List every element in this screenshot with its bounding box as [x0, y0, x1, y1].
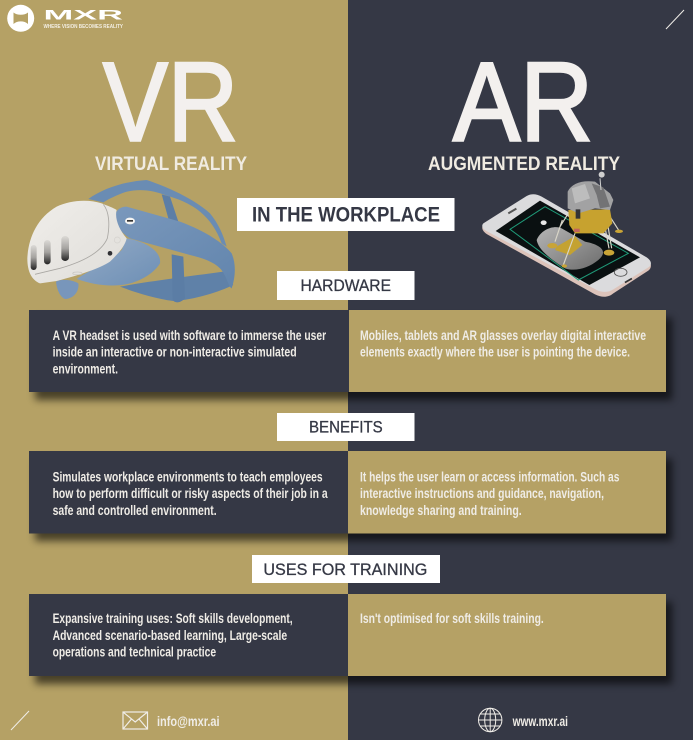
text: email: info@mxr.ai: [157, 714, 220, 729]
icon: globe: [478, 708, 502, 732]
background: VR half: [0, 0, 348, 740]
text: AR benefits: interactive instructions and guidance, navigation,: [360, 486, 604, 501]
text: VR hardware: [53, 328, 327, 376]
decorative slash bottom left: [11, 711, 29, 730]
icon: AR phone with lunar module: [482, 172, 651, 297]
text: VR hardware: environment.: [53, 362, 118, 376]
icon: envelope: [123, 712, 148, 729]
panel: uses for training comparison: [29, 594, 672, 684]
text: AR training uses: Isn't optimised for soft skills training.: [360, 611, 544, 626]
text: VR benefits: [53, 470, 328, 518]
subtitle: Augmented Reality: AUGMENTED REALITY: [428, 154, 620, 175]
subtitle: Virtual Reality: VIRTUAL REALITY: [95, 154, 247, 175]
text: AR benefits: [360, 470, 619, 518]
text: VR benefits: safe and controlled environment.: [53, 503, 217, 518]
logo: MXR: [44, 8, 124, 22]
text: AR hardware: [360, 328, 646, 360]
heading: Hardware: [277, 271, 414, 300]
logo: WHERE VISION BECOMES REALITY: [44, 24, 123, 30]
title: VR: VR: [103, 40, 238, 165]
heading: Hardware: HARDWARE: [300, 276, 391, 295]
text: VR hardware: inside an interactive or non-interactive simulated: [53, 345, 297, 360]
decorative slash top right: [666, 10, 684, 29]
heading: In the workplace: IN THE WORKPLACE: [252, 204, 440, 227]
text: VR benefits: Simulates workplace environments to teach employees: [53, 470, 323, 484]
panel: hardware comparison: [29, 310, 672, 400]
heading: Benefits: BENEFITS: [309, 418, 383, 437]
text: website: www.mxr.ai: [512, 714, 568, 729]
heading: Benefits: [277, 413, 414, 441]
heading: Uses for training: [252, 555, 440, 583]
title: AR: AR: [453, 40, 593, 165]
text: VR training uses: Expansive training uses: Soft skills development,: [53, 611, 293, 626]
panel: benefits comparison: [29, 451, 672, 541]
text: VR hardware: A VR headset is used with software to immerse the user: [53, 328, 327, 343]
text: AR benefits: knowledge sharing and training.: [360, 503, 522, 518]
logo: [7, 5, 124, 32]
text: VR training uses: Advanced scenario-based learning, Large-scale: [53, 628, 288, 643]
icon: VR headset: [27, 180, 235, 302]
text: VR benefits: how to perform difficult or risky aspects of their job in a: [53, 486, 328, 501]
text: VR training uses: [53, 611, 293, 660]
heading: In the workplace: [237, 198, 454, 231]
background: AR half: [348, 0, 693, 740]
text: VR training uses: operations and technical practice: [53, 644, 216, 660]
heading: Uses for training: USES FOR TRAINING: [263, 560, 427, 579]
text: AR benefits: It helps the user learn or access information. Such as: [360, 470, 619, 484]
